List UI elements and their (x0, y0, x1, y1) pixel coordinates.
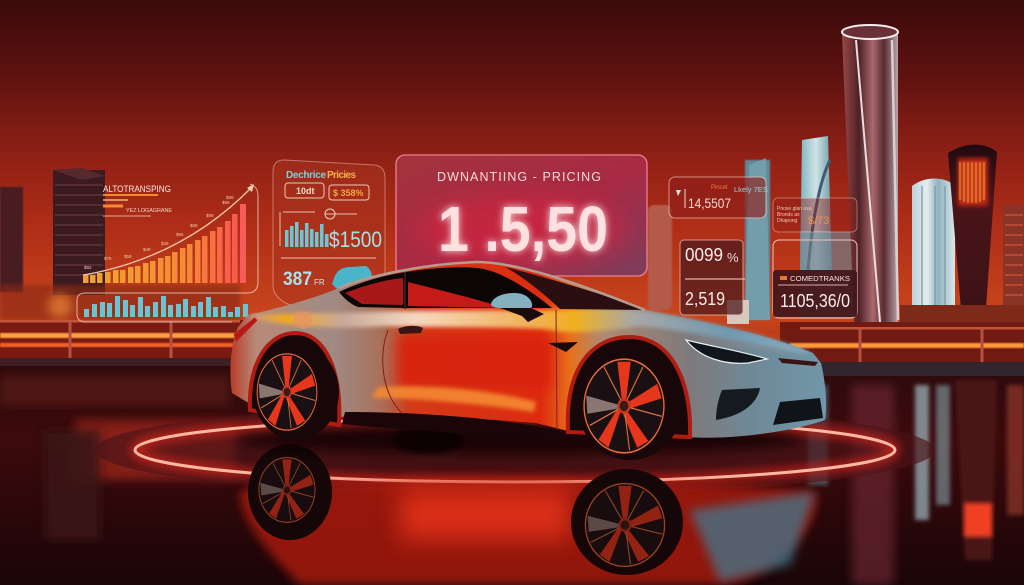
tiny bar value labels: $75 (104, 256, 112, 261)
bumper intake (716, 388, 760, 420)
card title: Dechrice (286, 170, 326, 181)
car body (230, 262, 826, 438)
window red reflection (345, 278, 403, 305)
right stat panel: note: Dhapong (777, 218, 798, 224)
tiny bar value labels: $59 (124, 254, 132, 259)
chart frames (77, 184, 258, 322)
pricing card panel (273, 160, 385, 305)
side mirror (491, 293, 532, 308)
right stat panel: note: Bronds as (777, 212, 800, 218)
pricing card panel: FR (314, 278, 325, 287)
right stat panel: note (773, 198, 857, 232)
right stat panel: percent: 2,519 (685, 289, 725, 309)
door red sweep (398, 336, 552, 388)
lower body glow (372, 386, 536, 412)
headlight (686, 340, 767, 363)
right stat panel: percent: % (727, 250, 739, 265)
central price panel (396, 155, 647, 276)
fender vent (548, 342, 578, 352)
sill shadow (342, 412, 575, 440)
rear arch (250, 333, 339, 425)
background sky (0, 0, 1024, 370)
pricing card panel: $ 358% (333, 188, 364, 198)
platform disc (95, 404, 935, 496)
car reflection (240, 444, 816, 585)
right stat panel: percent: 0099 (685, 245, 723, 265)
car (230, 262, 826, 460)
tiny bar value labels: $95 (176, 232, 184, 237)
right stat panel: note: $/73 (808, 215, 829, 227)
line chart panel (77, 184, 258, 322)
right stat panel: top: Lkely 7ES (734, 185, 768, 194)
pricing card panel: Pricies (327, 170, 356, 181)
right stat panel: totals (773, 240, 857, 318)
tiny bar value labels: $99 (226, 195, 234, 200)
windshield (505, 267, 645, 310)
floor (0, 362, 1024, 585)
front arch (568, 337, 690, 437)
left skyline (0, 168, 240, 320)
tail light (236, 319, 256, 338)
price: $1500 (329, 227, 382, 252)
rising bar chart (83, 204, 246, 283)
door handle (398, 326, 423, 334)
right stat panel: totals: 1105,36/0 (780, 291, 850, 311)
tiny bar value labels: $99 (222, 200, 230, 205)
count stat: 387 (283, 269, 312, 290)
teal pill (332, 266, 372, 292)
door line (383, 310, 557, 430)
front bumper (690, 344, 826, 438)
fuel cap (294, 311, 312, 329)
tiny bar value labels: $92 (84, 265, 92, 270)
tiny bar value labels: $39 (161, 241, 169, 246)
side windows (339, 267, 552, 308)
right stat panel: totals: COMEDTRANKS (790, 274, 850, 283)
rear wheel (253, 344, 339, 440)
right stat panel: top (669, 177, 768, 218)
right stat panel: percent (680, 240, 745, 315)
right stat panel: top: 14,5507 (688, 195, 731, 211)
floor reflections (0, 375, 1024, 585)
stat chips (285, 183, 324, 198)
glowing ring (135, 418, 895, 482)
right stat panel: note: Pnose glan usa (777, 206, 812, 212)
tiny bar value labels: $68 (190, 223, 198, 228)
mini chart (280, 212, 357, 246)
roof edge (339, 262, 645, 310)
body shoulder highlight (248, 309, 813, 354)
front wheel (578, 352, 682, 460)
panel heading: DWNANTIING - PRICING (437, 170, 601, 184)
big price: 1 .5,50 (438, 193, 608, 265)
tiny bar value labels (84, 195, 234, 270)
chart title: ALTOTRANSPING (103, 184, 171, 194)
pricing card panel: 10dt (296, 186, 315, 196)
line chart panel: YEZ LOGAGRANE (126, 208, 172, 214)
right stat panel: top: Pincet (711, 185, 728, 191)
tiny bar value labels: $49 (143, 247, 151, 252)
grille tip (778, 358, 818, 366)
railing (0, 320, 1024, 376)
tiny bar value labels: $99 (206, 213, 214, 218)
car shadow (240, 426, 800, 454)
right skyline (648, 25, 1024, 327)
growth arrow (84, 187, 252, 275)
lower bar chart (84, 296, 248, 317)
